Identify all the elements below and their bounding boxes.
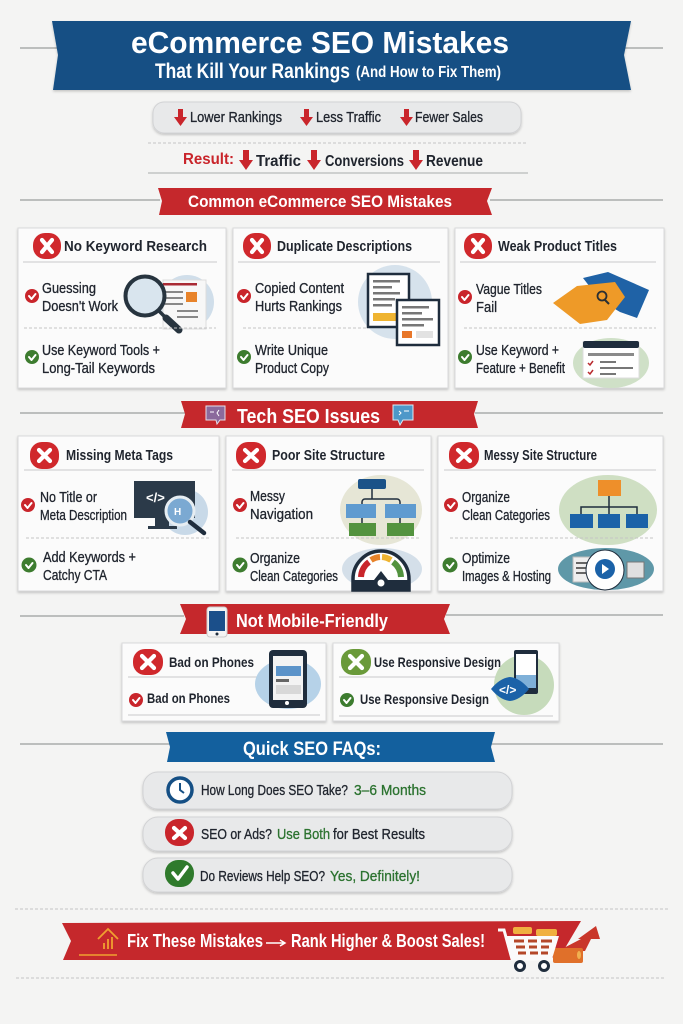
icon: blue speech bubble <box>393 405 413 425</box>
panel: use responsive design <box>333 643 559 721</box>
icon: red check <box>233 498 247 512</box>
result row: Result: <box>183 151 234 168</box>
mistake text: Bad on Phones <box>147 690 230 706</box>
mistake text: Vague Titles <box>476 282 542 298</box>
icon: messy sitemap <box>340 475 422 545</box>
impact pill <box>153 102 521 133</box>
icon: red x <box>449 442 479 469</box>
icon: phone <box>207 607 227 637</box>
heading: Duplicate Descriptions <box>277 238 412 255</box>
icon: clean sitemap <box>559 475 657 545</box>
icon: duplicate documents <box>358 265 439 345</box>
heading: Poor Site Structure <box>272 448 385 464</box>
mistake text <box>42 281 119 315</box>
icon: media optimisation <box>558 548 654 590</box>
subtitle <box>155 60 501 83</box>
fix text: Organize <box>250 551 300 567</box>
fix text <box>250 551 338 585</box>
icon: purple speech bubble <box>206 406 225 424</box>
mistake text <box>250 489 313 523</box>
icon: phone illustration <box>255 650 321 709</box>
mistake text: Hurts Rankings <box>255 299 342 315</box>
section banner: not mobile-friendly: Not Mobile-Friendly <box>236 611 388 631</box>
fix text: Use Responsive Design <box>360 691 489 707</box>
mistake text: Doesn't Work <box>42 299 119 315</box>
fix text <box>462 551 551 585</box>
faq: seo or ads: SEO or Ads? <box>201 827 272 843</box>
icon: red check <box>458 290 472 304</box>
fix text: Product Copy <box>255 361 330 377</box>
icon: green check <box>165 860 194 887</box>
title: eCommerce SEO Mistakes <box>131 25 509 60</box>
section banner: not mobile-friendly <box>180 604 450 637</box>
fix text: Long-Tail Keywords <box>42 361 155 377</box>
heading: Use Responsive Design <box>374 654 501 670</box>
icon: magnifier over page <box>126 275 214 330</box>
heading: No Keyword Research <box>64 238 207 255</box>
faq: reviews: Yes, Definitely! <box>330 869 420 885</box>
section banner: quick seo faqs <box>166 732 495 762</box>
heading: Weak Product Titles <box>498 238 617 255</box>
icon: monitor with magnifier: </> <box>146 490 165 505</box>
panel: no keyword research <box>18 228 226 388</box>
heading: Bad on Phones <box>169 654 254 670</box>
impact pill: Lower Rankings <box>190 110 282 126</box>
icon: green check <box>442 558 458 572</box>
mistake text <box>40 490 127 524</box>
mistake text: Organize <box>462 490 510 506</box>
section banner: quick seo faqs: Quick SEO FAQs: <box>243 739 381 760</box>
icon: clock <box>168 778 192 802</box>
faq: reviews <box>143 858 512 892</box>
icon: red x <box>464 233 492 259</box>
mistake text: Meta Description <box>40 508 127 524</box>
icon: product tags <box>553 272 649 324</box>
icon: green check <box>22 558 36 572</box>
panel: missing meta tags <box>18 436 219 591</box>
fix text: Use Keyword Tools + <box>42 343 160 359</box>
icon: red x <box>33 233 61 259</box>
icon: red check <box>129 693 143 707</box>
fix text <box>476 343 565 377</box>
faq: reviews: Do Reviews Help SEO? <box>200 869 325 885</box>
panel: poor site structure <box>226 436 431 591</box>
icon: growth arrow <box>553 926 600 963</box>
mistake text <box>462 490 550 524</box>
cta banner <box>62 921 600 970</box>
icon: green x <box>341 649 371 675</box>
heading: Missing Meta Tags <box>66 448 173 464</box>
icon: responsive phone with code badge: </> <box>499 683 516 697</box>
result row: Traffic <box>256 153 301 170</box>
mistake text: Messy <box>250 489 286 505</box>
fix text: Write Unique <box>255 343 328 359</box>
icon: green check <box>232 558 248 572</box>
icon: responsive phone with code badge <box>491 650 554 715</box>
icon: green check <box>340 693 354 707</box>
section banner: tech seo issues <box>181 401 478 428</box>
mistake text: No Title or <box>40 490 97 506</box>
icon: green check <box>237 350 251 364</box>
mistake text: Navigation <box>250 507 313 523</box>
icon: red check <box>25 289 39 303</box>
icon: green check <box>458 350 472 364</box>
impact pill: Fewer Sales <box>415 110 483 126</box>
fix text: Add Keywords + <box>43 550 136 566</box>
fix text <box>255 343 330 377</box>
panel: duplicate descriptions <box>233 228 448 388</box>
section banner: common mistakes: Common eCommerce SEO Mistakes <box>188 192 452 211</box>
icon: green check <box>25 350 39 364</box>
faq: seo or ads: Use Both <box>277 827 330 843</box>
icon: checklist <box>573 338 649 388</box>
icon: red x <box>133 649 163 675</box>
fix text: Clean Categories <box>250 569 338 585</box>
fix text: Catchy CTA <box>43 568 107 584</box>
mistake text <box>255 281 344 315</box>
result row: Revenue <box>426 153 483 170</box>
icon: red check <box>21 498 35 512</box>
faq: seo or ads <box>143 817 512 851</box>
icon: red check <box>237 289 251 303</box>
result row <box>183 150 483 170</box>
mistake text: Fail <box>476 300 497 316</box>
faq: how long: 3–6 Months <box>354 783 426 799</box>
fix text: Feature + Benefit <box>476 361 565 377</box>
fix text <box>42 343 160 377</box>
icon: shopping cart <box>498 927 559 970</box>
faq: seo or ads: for Best Results <box>333 827 425 843</box>
title banner <box>52 21 631 90</box>
cta banner: Fix These Mistakes <box>127 931 263 951</box>
impact pill: Less Traffic <box>316 110 381 126</box>
section banner: tech seo issues: Tech SEO Issues <box>237 406 380 428</box>
fix text <box>43 550 136 584</box>
icon: red check <box>444 498 458 512</box>
faq: how long: How Long Does SEO Take? <box>201 783 348 799</box>
icon: red x <box>30 442 59 469</box>
fix text: Images & Hosting <box>462 569 551 585</box>
panel: messy site structure <box>438 436 663 591</box>
icon: red x <box>236 442 266 469</box>
icon: house chart <box>79 929 118 955</box>
faq: how long <box>143 772 512 809</box>
arrow <box>266 940 285 946</box>
heading: Messy Site Structure <box>484 448 597 464</box>
icon: monitor with magnifier: H <box>174 507 181 518</box>
cta banner: Rank Higher & Boost Sales! <box>291 931 485 951</box>
icon: speed gauge <box>342 548 422 591</box>
panel: bad on phones <box>122 643 326 721</box>
panel: weak product titles <box>455 228 664 388</box>
icon: monitor with magnifier <box>134 481 208 535</box>
fix text: Optimize <box>462 551 510 567</box>
mistake text: Clean Categories <box>462 508 550 524</box>
subtitle: That Kill Your Rankings <box>155 60 350 83</box>
icon: red x <box>243 233 271 259</box>
mistake text: Guessing <box>42 281 96 297</box>
subtitle: (And How to Fix Them) <box>356 64 501 81</box>
mistake text: Copied Content <box>255 281 344 297</box>
mistake text <box>476 282 542 316</box>
result row: Conversions <box>325 153 404 170</box>
section banner: common mistakes <box>158 188 492 215</box>
fix text: Use Keyword + <box>476 343 559 359</box>
icon: red x <box>165 819 194 846</box>
